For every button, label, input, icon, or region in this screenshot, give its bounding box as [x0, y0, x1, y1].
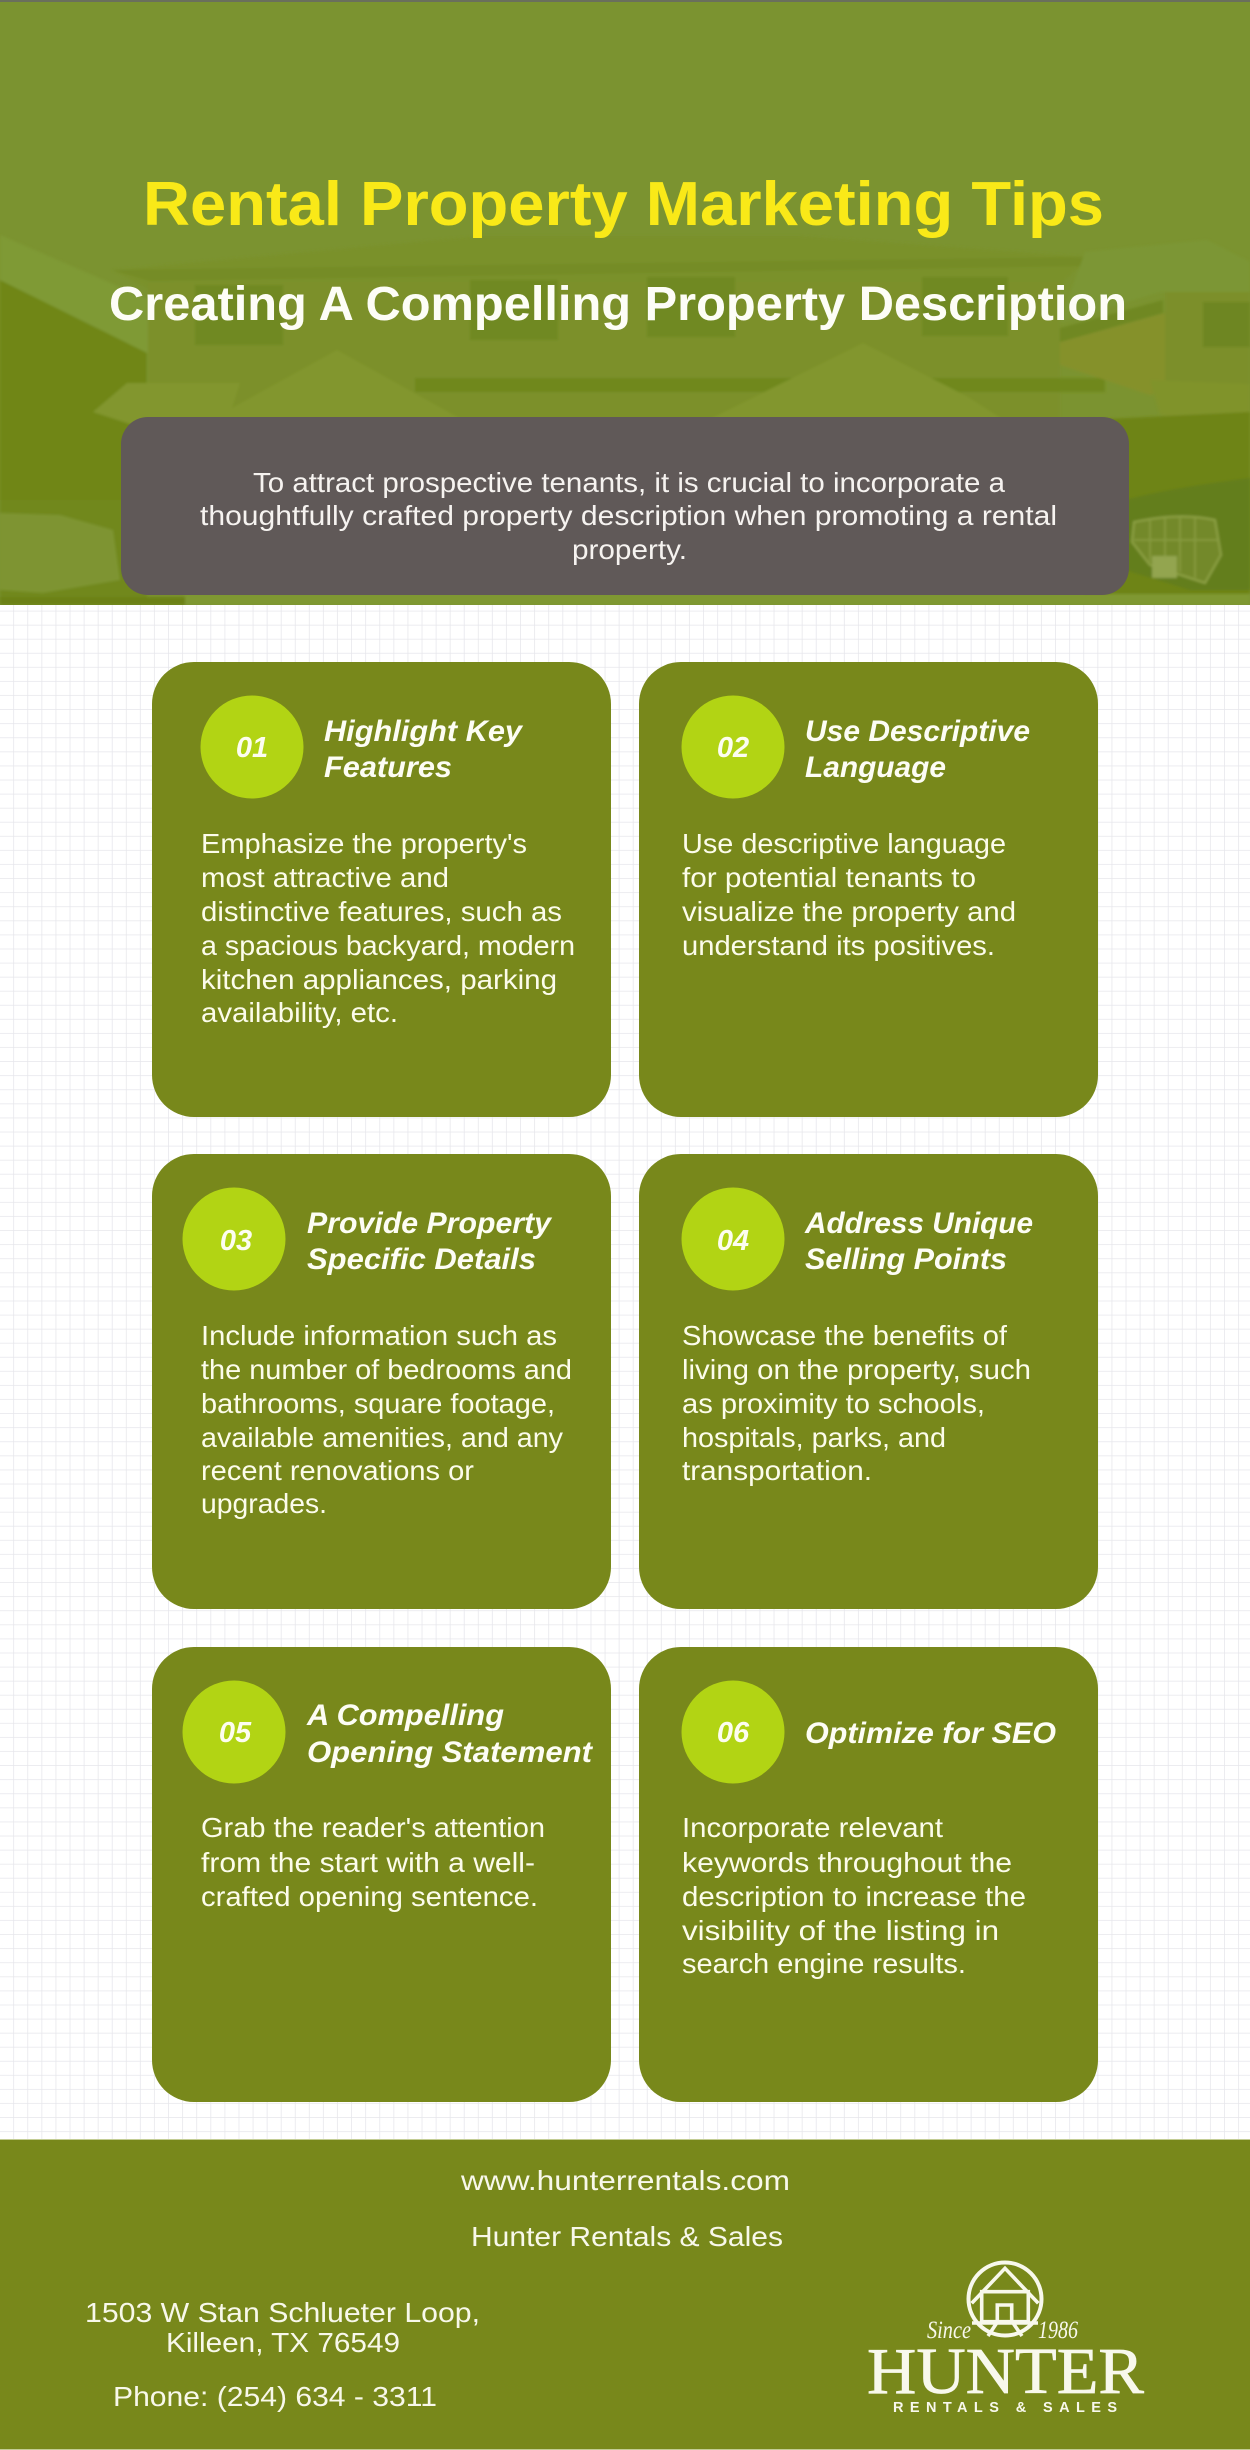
- title: Rental Property Marketing Tips: [143, 170, 1104, 239]
- body 04: Showcase the benefits of: [682, 1320, 1007, 1351]
- icon: house in circle: [968, 2262, 1042, 2336]
- number badge 03: 03: [220, 1225, 252, 1257]
- panel: intro: thoughtfully crafted property description when promoting a rental: [200, 500, 1057, 531]
- heading 04: [804, 1207, 1033, 1276]
- panel: tip 03: [152, 1154, 611, 1609]
- body 01: availability, etc.: [201, 997, 398, 1028]
- address: [85, 2297, 480, 2358]
- heading 02: Language: [805, 751, 946, 784]
- body 03: the number of bedrooms and: [201, 1354, 572, 1385]
- heading 05: Opening Statement: [307, 1736, 594, 1769]
- heading 04: Address Unique: [804, 1207, 1033, 1240]
- website: www.hunterrentals.com: [460, 2165, 790, 2196]
- heading 06: Optimize for SEO: [805, 1717, 1056, 1750]
- number badge 06: 06: [717, 1717, 750, 1749]
- body 02: understand its positives.: [682, 930, 995, 961]
- address: Killeen, TX 76549: [166, 2327, 400, 2358]
- photo: parked car: [1125, 478, 1250, 590]
- heading 05: [306, 1699, 594, 1769]
- body 04: living on the property, such: [682, 1354, 1031, 1385]
- header banner with house photo: [0, 0, 1250, 605]
- heading 04: Selling Points: [805, 1243, 1007, 1276]
- since: Since: [927, 2317, 971, 2344]
- subtitle: Creating A Compelling Property Description: [109, 278, 1127, 331]
- panel: tip 04: [639, 1154, 1098, 1609]
- heading 03: Provide Property: [307, 1207, 552, 1240]
- heading 02: Use Descriptive: [805, 715, 1030, 748]
- body 06: visibility of the listing in: [682, 1915, 999, 1946]
- heading 03: [307, 1207, 552, 1276]
- footer: [0, 2139, 1250, 2450]
- panel: intro: property.: [572, 534, 687, 565]
- address: 1503 W Stan Schlueter Loop,: [85, 2297, 480, 2328]
- heading 02: [805, 715, 1030, 784]
- panel: intro: [121, 417, 1129, 595]
- number badge 02: 02: [717, 732, 749, 764]
- company name: Hunter Rentals & Sales: [471, 2221, 783, 2252]
- body 06: search engine results.: [682, 1948, 966, 1979]
- panel: tip 05: [152, 1647, 611, 2102]
- body 06: description to increase the: [682, 1881, 1026, 1912]
- body 02: [682, 828, 1016, 961]
- body 03: bathrooms, square footage,: [201, 1388, 555, 1419]
- body 04: transportation.: [682, 1455, 872, 1486]
- body 04: [682, 1320, 1031, 1486]
- body 03: Include information such as: [201, 1320, 557, 1351]
- logo: Hunter Rentals & Sales: [867, 2262, 1144, 2416]
- body 04: hospitals, parks, and: [682, 1422, 946, 1453]
- body 01: [201, 828, 575, 1028]
- heading 01: [324, 715, 523, 784]
- body 01: Emphasize the property's: [201, 828, 527, 859]
- number badge 05: 05: [219, 1717, 252, 1749]
- body 06: Incorporate relevant: [682, 1812, 943, 1843]
- number badge 04: [682, 1188, 784, 1290]
- body 06: [682, 1812, 1026, 1979]
- number badge 03: [182, 1188, 286, 1290]
- body 05: crafted opening sentence.: [201, 1881, 538, 1912]
- body 02: for potential tenants to: [682, 862, 976, 893]
- number badge 04: 04: [717, 1225, 749, 1257]
- number badge 02: [682, 696, 784, 798]
- body 01: distinctive features, such as: [201, 896, 562, 927]
- body 04: as proximity to schools,: [682, 1388, 985, 1419]
- panel: tip 02: [639, 662, 1098, 1117]
- body 01: a spacious backyard, modern: [201, 930, 575, 961]
- body 05: [201, 1812, 545, 1912]
- body 02: Use descriptive language: [682, 828, 1006, 859]
- body 05: from the start with a well-: [201, 1847, 535, 1878]
- number badge 01: 01: [236, 732, 268, 764]
- panel: tip 06: [639, 1647, 1098, 2102]
- body 03: upgrades.: [201, 1488, 327, 1519]
- year: 1986: [1038, 2317, 1078, 2344]
- body 06: keywords throughout the: [682, 1847, 1012, 1878]
- heading 03: Specific Details: [307, 1243, 536, 1276]
- heading 01: Highlight Key: [324, 715, 523, 748]
- number badge 01: [200, 696, 304, 798]
- number badge 06: [682, 1680, 784, 1784]
- photo: tinted house background: [0, 235, 1250, 605]
- panel: intro: To attract prospective tenants, it is crucial to incorporate a: [253, 467, 1005, 498]
- body 02: visualize the property and: [682, 896, 1016, 927]
- wordmark: HUNTER: [867, 2335, 1144, 2408]
- tagline: RENTALS & SALES: [893, 2400, 1117, 2416]
- body 05: Grab the reader's attention: [201, 1812, 545, 1843]
- phone: Phone: (254) 634 - 3311: [113, 2381, 437, 2412]
- body 01: kitchen appliances, parking: [201, 964, 557, 995]
- heading 05: A Compelling: [306, 1699, 504, 1732]
- body 03: [201, 1320, 572, 1519]
- number badge 05: [182, 1680, 286, 1784]
- body 03: recent renovations or: [201, 1455, 474, 1486]
- heading 01: Features: [324, 751, 452, 784]
- panel: tip 01: [152, 662, 611, 1117]
- body 01: most attractive and: [201, 862, 449, 893]
- body 03: available amenities, and any: [201, 1422, 563, 1453]
